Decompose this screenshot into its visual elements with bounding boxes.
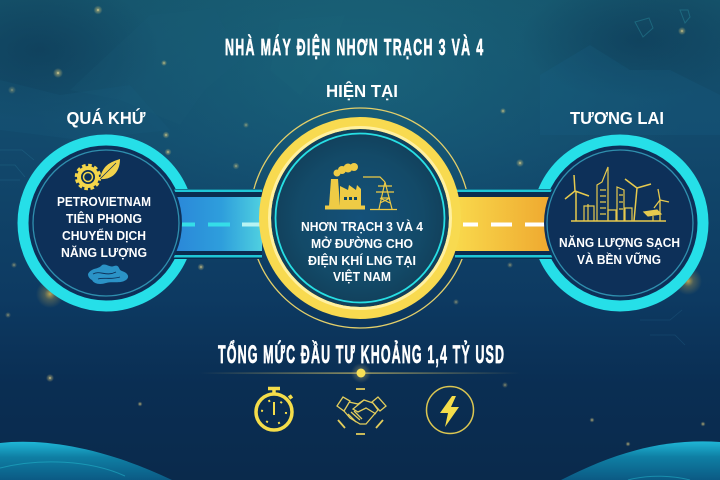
connector band: present to future [455,189,555,259]
text: past description [57,195,151,260]
icon: water shape [88,265,128,284]
text: future description: VÀ BỀN VỮNG [577,252,661,267]
heading: future: TƯƠNG LAI [570,108,664,128]
text: past description: TIÊN PHONG [66,211,142,226]
icon: gear and leaf [76,159,120,188]
heading: total investment: TỔNG MỨC ĐẦU TƯ KHOẢNG 1,4 TỶ USD [218,339,504,369]
panel: present circle [265,123,455,313]
icon: factory and power tower [325,163,397,210]
text: present description: ĐIỆN KHÍ LNG TẠI [308,253,416,268]
connector band: past to present [172,189,262,259]
text: past description: PETROVIETNAM [57,195,151,209]
text: present description: NHƠN TRẠCH 3 VÀ 4 [301,219,423,234]
heading: past: QUÁ KHỨ [66,107,146,128]
icon: lightning bolt [426,386,474,434]
ring: present thin outline [250,108,470,328]
text: past description: NĂNG LƯỢNG [61,245,147,260]
icon: stopwatch [256,388,292,430]
icon: wind turbines and city [565,167,669,221]
panel: future circle [544,147,696,299]
bottom left arc [0,442,172,480]
text: present description [301,219,423,284]
text: past description: CHUYỂN DỊCH [62,228,146,243]
heading: present: HIỆN TẠI [326,80,398,101]
bottom right arc [561,441,720,480]
text: present description: VIỆT NAM [333,269,391,284]
text: future description: NĂNG LƯỢNG SẠCH [559,235,680,250]
title: NHÀ MÁY ĐIỆN NHƠN TRẠCH 3 VÀ 4 [225,34,484,60]
ring: future circle [537,140,703,306]
text: present description: MỞ ĐƯỜNG CHO [311,236,413,251]
text: future description [559,235,680,267]
ring: past circle [23,140,189,306]
divider with glowing dot [200,363,520,383]
panel: past circle [30,147,182,299]
icon: handshake [337,389,386,434]
